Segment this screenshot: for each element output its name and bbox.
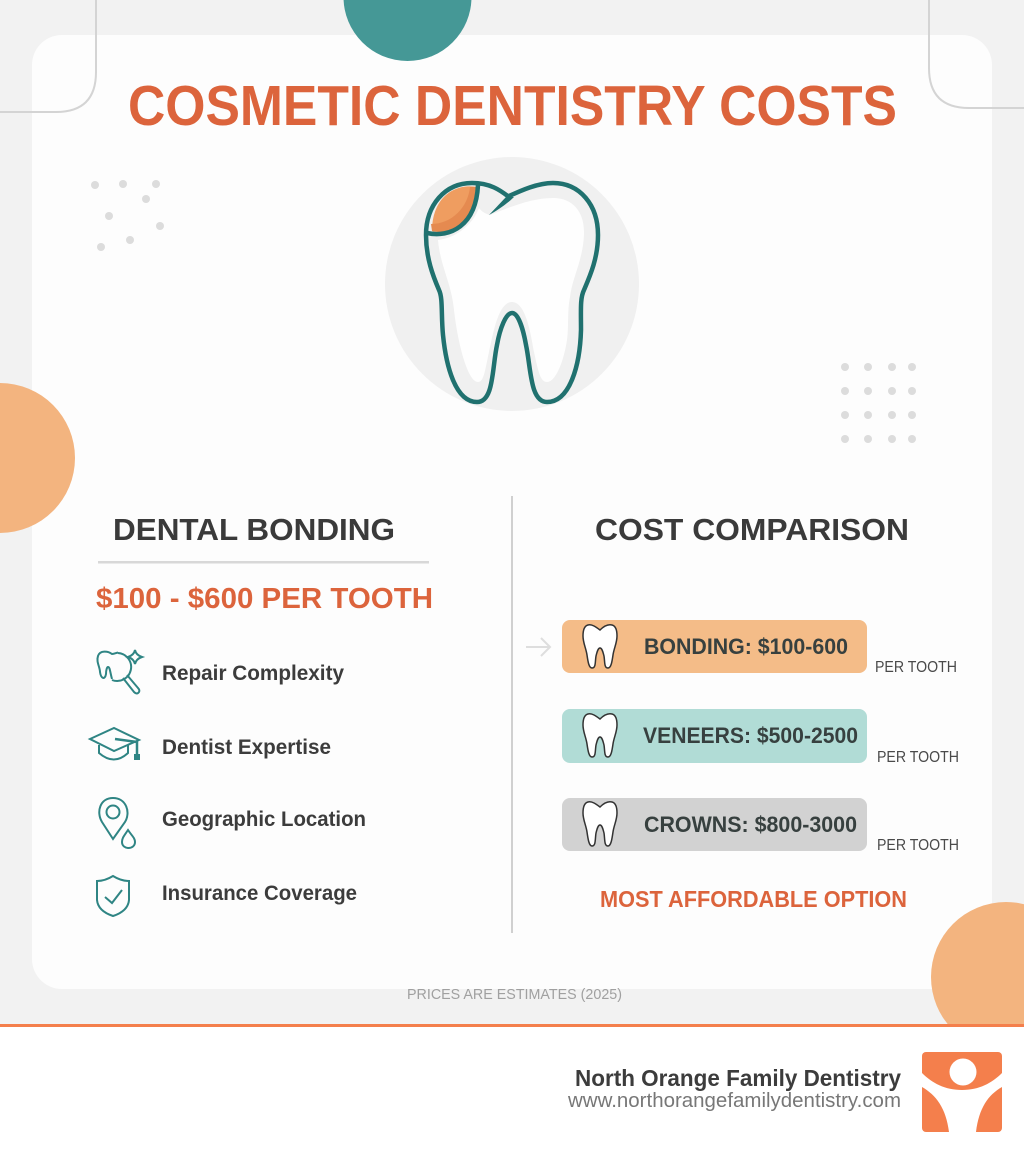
icon: graduation cap [90, 728, 139, 760]
footer [0, 1024, 1024, 1154]
factor: insurance coverage [97, 876, 357, 916]
dot grid [841, 363, 916, 443]
divider [98, 561, 429, 564]
heading: cost comparison: COST COMPARISON [595, 512, 909, 547]
price range: $100 - $600 PER TOOTH [96, 583, 433, 615]
callout: most affordable: MOST AFFORDABLE OPTION [600, 886, 907, 912]
icon: tooth under magnifier [97, 650, 142, 694]
heading: dental bonding: DENTAL BONDING [113, 512, 395, 547]
label: Insurance Coverage [162, 881, 357, 905]
icon: tooth [583, 802, 617, 846]
corner outline: top left [0, 0, 96, 112]
icon: tooth [583, 625, 617, 668]
icon: map pin and drop [99, 798, 135, 848]
website: www.northorangefamilydentistry.com [567, 1090, 901, 1112]
clinic name: North Orange Family Dentistry [575, 1065, 901, 1091]
factor: dentist expertise [90, 728, 331, 760]
decorative orange circle right [931, 902, 1024, 1052]
label: VENEERS: $500-2500 [643, 723, 858, 748]
unit: crowns: PER TOOTH [877, 837, 959, 854]
logo [922, 1052, 1002, 1132]
label: Dentist Expertise [162, 735, 331, 759]
bar: veneers [562, 709, 867, 763]
icon: shield with check [97, 876, 129, 916]
label: Repair Complexity [162, 661, 344, 685]
scattered dots [91, 180, 164, 251]
icon: main tooth [385, 157, 639, 411]
label: Geographic Location [162, 807, 366, 831]
label: CROWNS: $800-3000 [644, 812, 857, 837]
label: BONDING: $100-600 [644, 634, 848, 659]
bar: bonding [562, 620, 867, 673]
factor: geographic location [99, 798, 366, 848]
unit: bonding: PER TOOTH [875, 659, 957, 676]
factor: repair complexity [97, 650, 344, 694]
decorative teal circle [344, 0, 472, 61]
icon: arrow [526, 638, 550, 656]
unit: veneers: PER TOOTH [877, 749, 959, 766]
panel: main card [32, 35, 992, 989]
decorative orange circle left [0, 383, 75, 533]
note: estimates: PRICES ARE ESTIMATES (2025) [407, 987, 622, 1003]
corner outline: top right [929, 0, 1024, 108]
title: COSMETIC DENTISTRY COSTS [128, 74, 897, 138]
bar: crowns [562, 798, 867, 851]
center divider [511, 496, 513, 933]
icon: tooth [583, 714, 617, 757]
